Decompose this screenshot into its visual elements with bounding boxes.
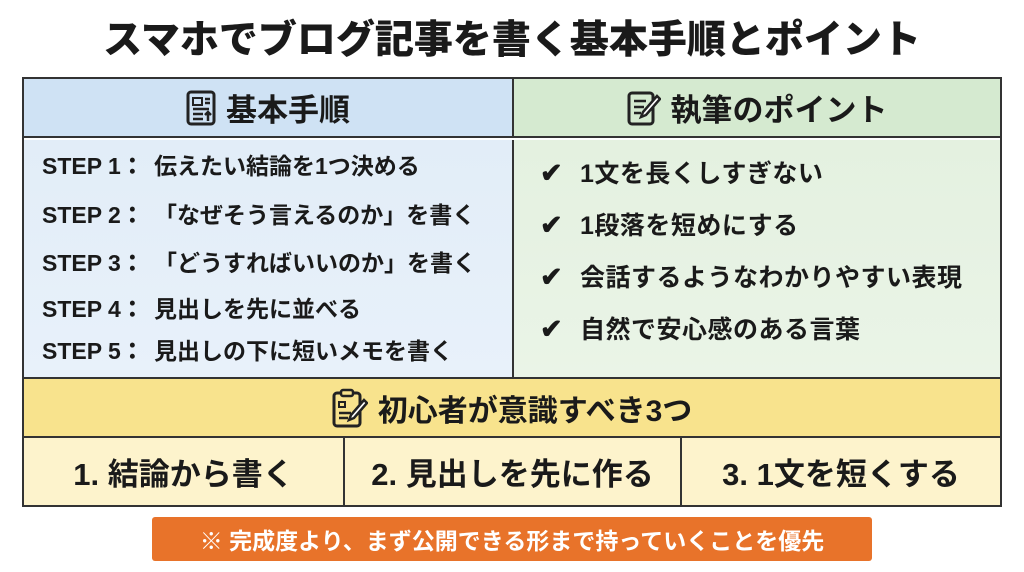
- step 5: 見出しの下に短いメモを書く: [154, 338, 453, 364]
- step 1: 伝えたい結論を1つ決める: [154, 153, 420, 179]
- point 4: 自然で安心感のある言葉: [580, 316, 861, 344]
- cell 1: 1. 結論から書く: [73, 457, 294, 492]
- step 3: STEP 3：: [42, 250, 144, 276]
- panel: steps body: [24, 140, 512, 377]
- step 3: 「どうすればいいのか」を書く: [154, 250, 476, 276]
- panel: points body: [512, 140, 1000, 377]
- panel: basic steps header: 基本手順: [226, 93, 350, 128]
- panel: writing points header: [512, 79, 1000, 138]
- cell 1: [24, 438, 343, 505]
- icon: pen on paper: [628, 92, 661, 126]
- callout: orange note: [152, 517, 872, 561]
- icon: clipboard: [332, 388, 368, 428]
- panel: basic steps header: [24, 79, 512, 138]
- step 1: STEP 1：: [42, 153, 144, 179]
- panel: beginner header: [24, 377, 1000, 438]
- point 3: 会話するようなわかりやすい表現: [580, 264, 963, 292]
- step 5: STEP 5：: [42, 338, 144, 364]
- title: スマホでブログ記事を書く基本手順とポイント: [103, 19, 921, 62]
- step 2: 「なぜそう言えるのか」を書く: [154, 202, 475, 228]
- icon: document: [186, 90, 216, 126]
- panel: writing points header: 執筆のポイント: [670, 93, 888, 128]
- callout: orange note: ※ 完成度より、まず公開できる形まで持っていくことを優先: [200, 528, 824, 554]
- cell 3: [680, 438, 1000, 505]
- cell 2: [343, 438, 680, 505]
- panel: beginner header: 初心者が意識すべき3つ: [378, 394, 692, 428]
- step 4: [42, 296, 361, 322]
- main table: [22, 77, 1002, 507]
- step 2: STEP 2：: [42, 202, 144, 228]
- step 4: STEP 4：: [42, 296, 144, 322]
- cell 2: 2. 見出しを先に作る: [371, 457, 654, 492]
- cell 3: 3. 1文を短くする: [722, 457, 960, 492]
- point 2: ✔: [540, 210, 563, 240]
- point 4: ✔: [540, 314, 563, 344]
- point 3: ✔: [540, 262, 563, 292]
- point 1: 1文を長くしすぎない: [580, 160, 823, 188]
- step 4: 見出しを先に並べる: [154, 296, 361, 322]
- point 1: ✔: [540, 158, 563, 188]
- point 2: 1段落を短めにする: [580, 212, 799, 240]
